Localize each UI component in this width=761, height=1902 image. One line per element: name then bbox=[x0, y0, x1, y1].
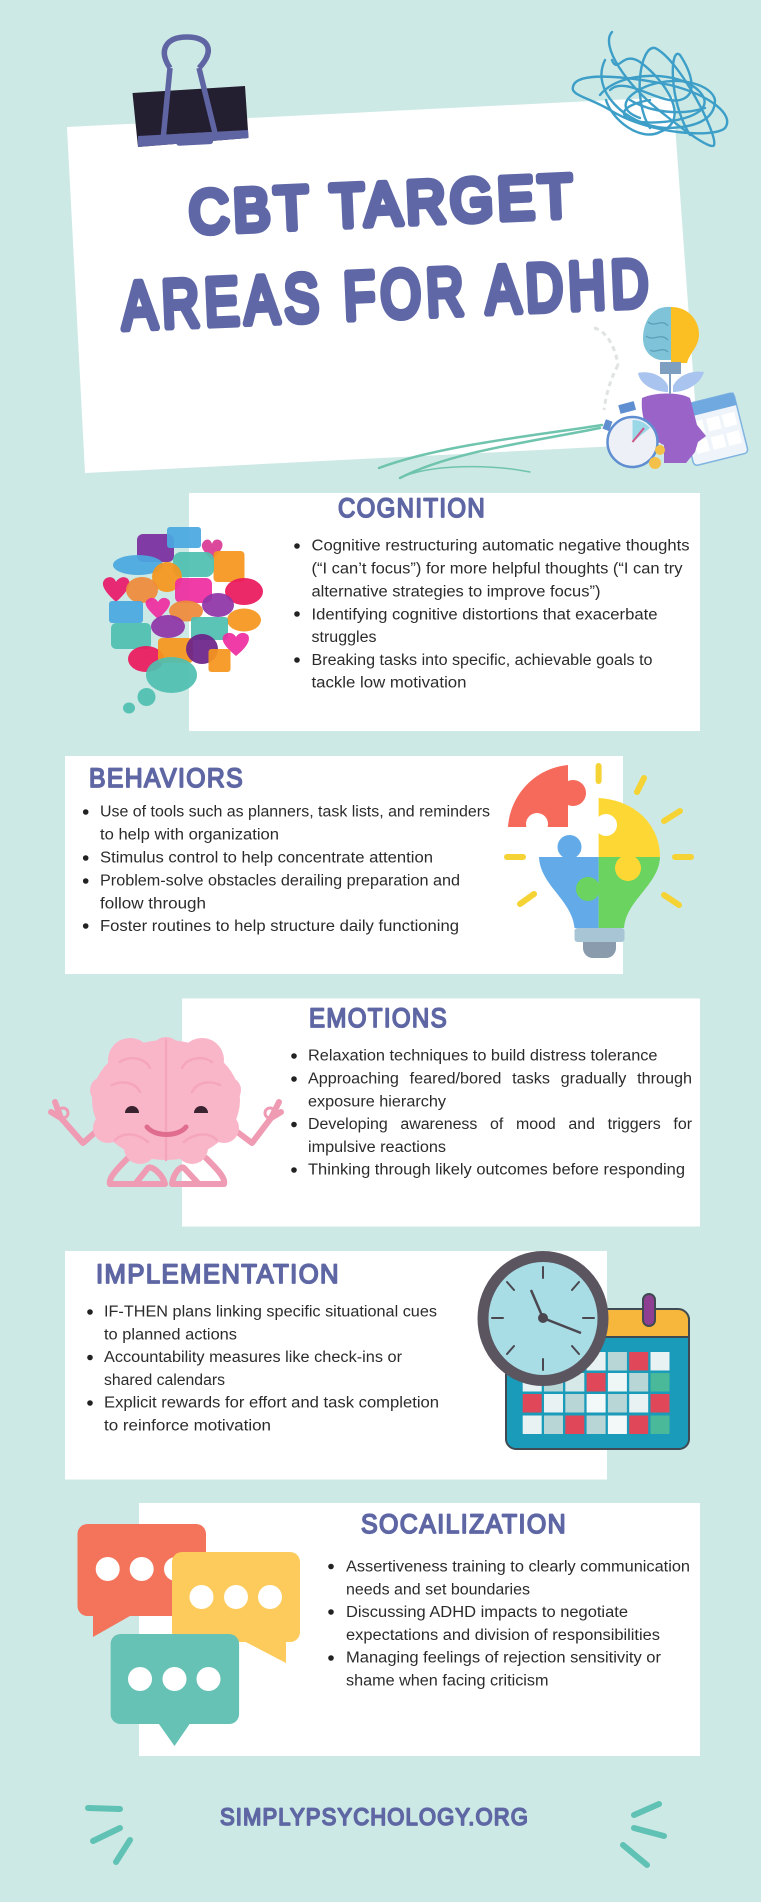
bullet list: behaviors: Stimulus control to help concentrate attention bbox=[100, 850, 433, 867]
icon: teal speech bubble bbox=[111, 1634, 239, 1746]
panel: title card bbox=[67, 97, 698, 473]
bullet list: emotions: exposure hierarchy bbox=[308, 1093, 446, 1110]
bullet list: cognition: Breaking tasks into specific, achievable goals to bbox=[312, 652, 652, 669]
icon: red speech bubble bbox=[78, 1524, 206, 1637]
bullet list: implementation: shared calendars bbox=[104, 1372, 225, 1389]
bullet list: behaviors: to help with organization bbox=[100, 827, 279, 844]
bullet list: cognition: alternative strategies to improve focus”) bbox=[312, 583, 600, 600]
bullet list: socialization: Assertiveness training to clearly communication bbox=[346, 1558, 690, 1575]
panel: socialization bbox=[139, 1503, 700, 1756]
bullet list: behaviors: Foster routines to help structure daily functioning bbox=[100, 918, 459, 935]
bullet list: cognition: Cognitive restructuring automatic negative thoughts bbox=[312, 538, 690, 555]
bullet list: emotions: impulsive reactions bbox=[308, 1139, 446, 1156]
bullet list: emotions: Thinking through likely outcomes before responding bbox=[308, 1162, 685, 1179]
icon: thought cloud of speech bubbles bbox=[103, 527, 263, 714]
bullet list: implementation bbox=[87, 1304, 439, 1435]
heading: emotions: EMOTIONS bbox=[309, 1003, 448, 1033]
heading: socialization: SOCAILIZATION bbox=[361, 1509, 567, 1539]
bullet list: emotions: Relaxation techniques to build distress tolerance bbox=[308, 1047, 658, 1064]
bullet list: emotions: Approaching feared/bored tasks gradually through bbox=[308, 1070, 692, 1087]
bullet list: emotions: Developing awareness of mood and triggers for bbox=[308, 1116, 692, 1133]
icon: left footer dashes bbox=[88, 1808, 130, 1862]
title: CBT TARGET bbox=[188, 162, 578, 246]
icon: binder clip bbox=[132, 37, 248, 147]
icon: right footer dashes bbox=[623, 1804, 664, 1865]
bullet list: behaviors: Problem-solve obstacles derailing preparation and bbox=[100, 872, 460, 889]
bullet list: socialization: expectations and division of responsibilities bbox=[346, 1627, 660, 1644]
bullet list: socialization bbox=[328, 1558, 690, 1690]
icon: yellow speech bubble bbox=[172, 1552, 300, 1663]
title bbox=[120, 162, 655, 344]
footer website: SIMPLYPSYCHOLOGY.ORG bbox=[220, 1804, 529, 1831]
icon: head with brain bulb, clock and calendar bbox=[594, 307, 748, 469]
icon: blue scribble bbox=[573, 32, 727, 146]
bullet list: cognition: tackle low motivation bbox=[312, 675, 466, 692]
bullet list: socialization: Discussing ADHD impacts to negotiate bbox=[346, 1604, 628, 1621]
bullet list: cognition bbox=[294, 538, 690, 692]
bullet list: cognition: (“I can’t focus”) for more helpful thoughts (“I can try bbox=[312, 561, 683, 578]
bullet list: implementation: Explicit rewards for effort and task completion bbox=[104, 1395, 439, 1412]
panel: behaviors bbox=[65, 756, 623, 974]
bullet list: emotions bbox=[291, 1047, 692, 1179]
bullet list: cognition: Identifying cognitive distortions that exacerbate bbox=[312, 606, 658, 623]
bullet list: cognition: struggles bbox=[312, 629, 377, 646]
heading: behaviors: BEHAVIORS bbox=[89, 763, 244, 793]
bullet list: implementation: IF-THEN plans linking specific situational cues bbox=[104, 1304, 437, 1321]
icon: puzzle light bulb bbox=[507, 765, 691, 958]
bullet list: implementation: Accountability measures like check-ins or bbox=[104, 1349, 402, 1366]
heading: cognition: COGNITION bbox=[338, 493, 486, 523]
bullet list: socialization: needs and set boundaries bbox=[346, 1581, 530, 1598]
icon: clock and calendar bbox=[483, 1256, 689, 1449]
panel: cognition bbox=[189, 493, 700, 731]
icon: green pen strokes bbox=[379, 425, 602, 478]
panel: emotions bbox=[182, 998, 700, 1226]
bullet list: behaviors: follow through bbox=[100, 895, 206, 912]
bullet list: behaviors: Use of tools such as planners, task lists, and reminders bbox=[100, 804, 490, 821]
bullet list: implementation: to planned actions bbox=[104, 1326, 237, 1343]
bullet list: socialization: Managing feelings of rejection sensitivity or bbox=[346, 1650, 661, 1667]
bullet list: socialization: shame when facing criticism bbox=[346, 1673, 548, 1690]
panel: implementation bbox=[65, 1251, 607, 1480]
bullet list: implementation: to reinforce motivation bbox=[104, 1418, 271, 1435]
heading: implementation: IMPLEMENTATION bbox=[96, 1259, 340, 1289]
icon: meditating brain bbox=[51, 1037, 281, 1184]
bullet list: behaviors bbox=[83, 804, 490, 935]
